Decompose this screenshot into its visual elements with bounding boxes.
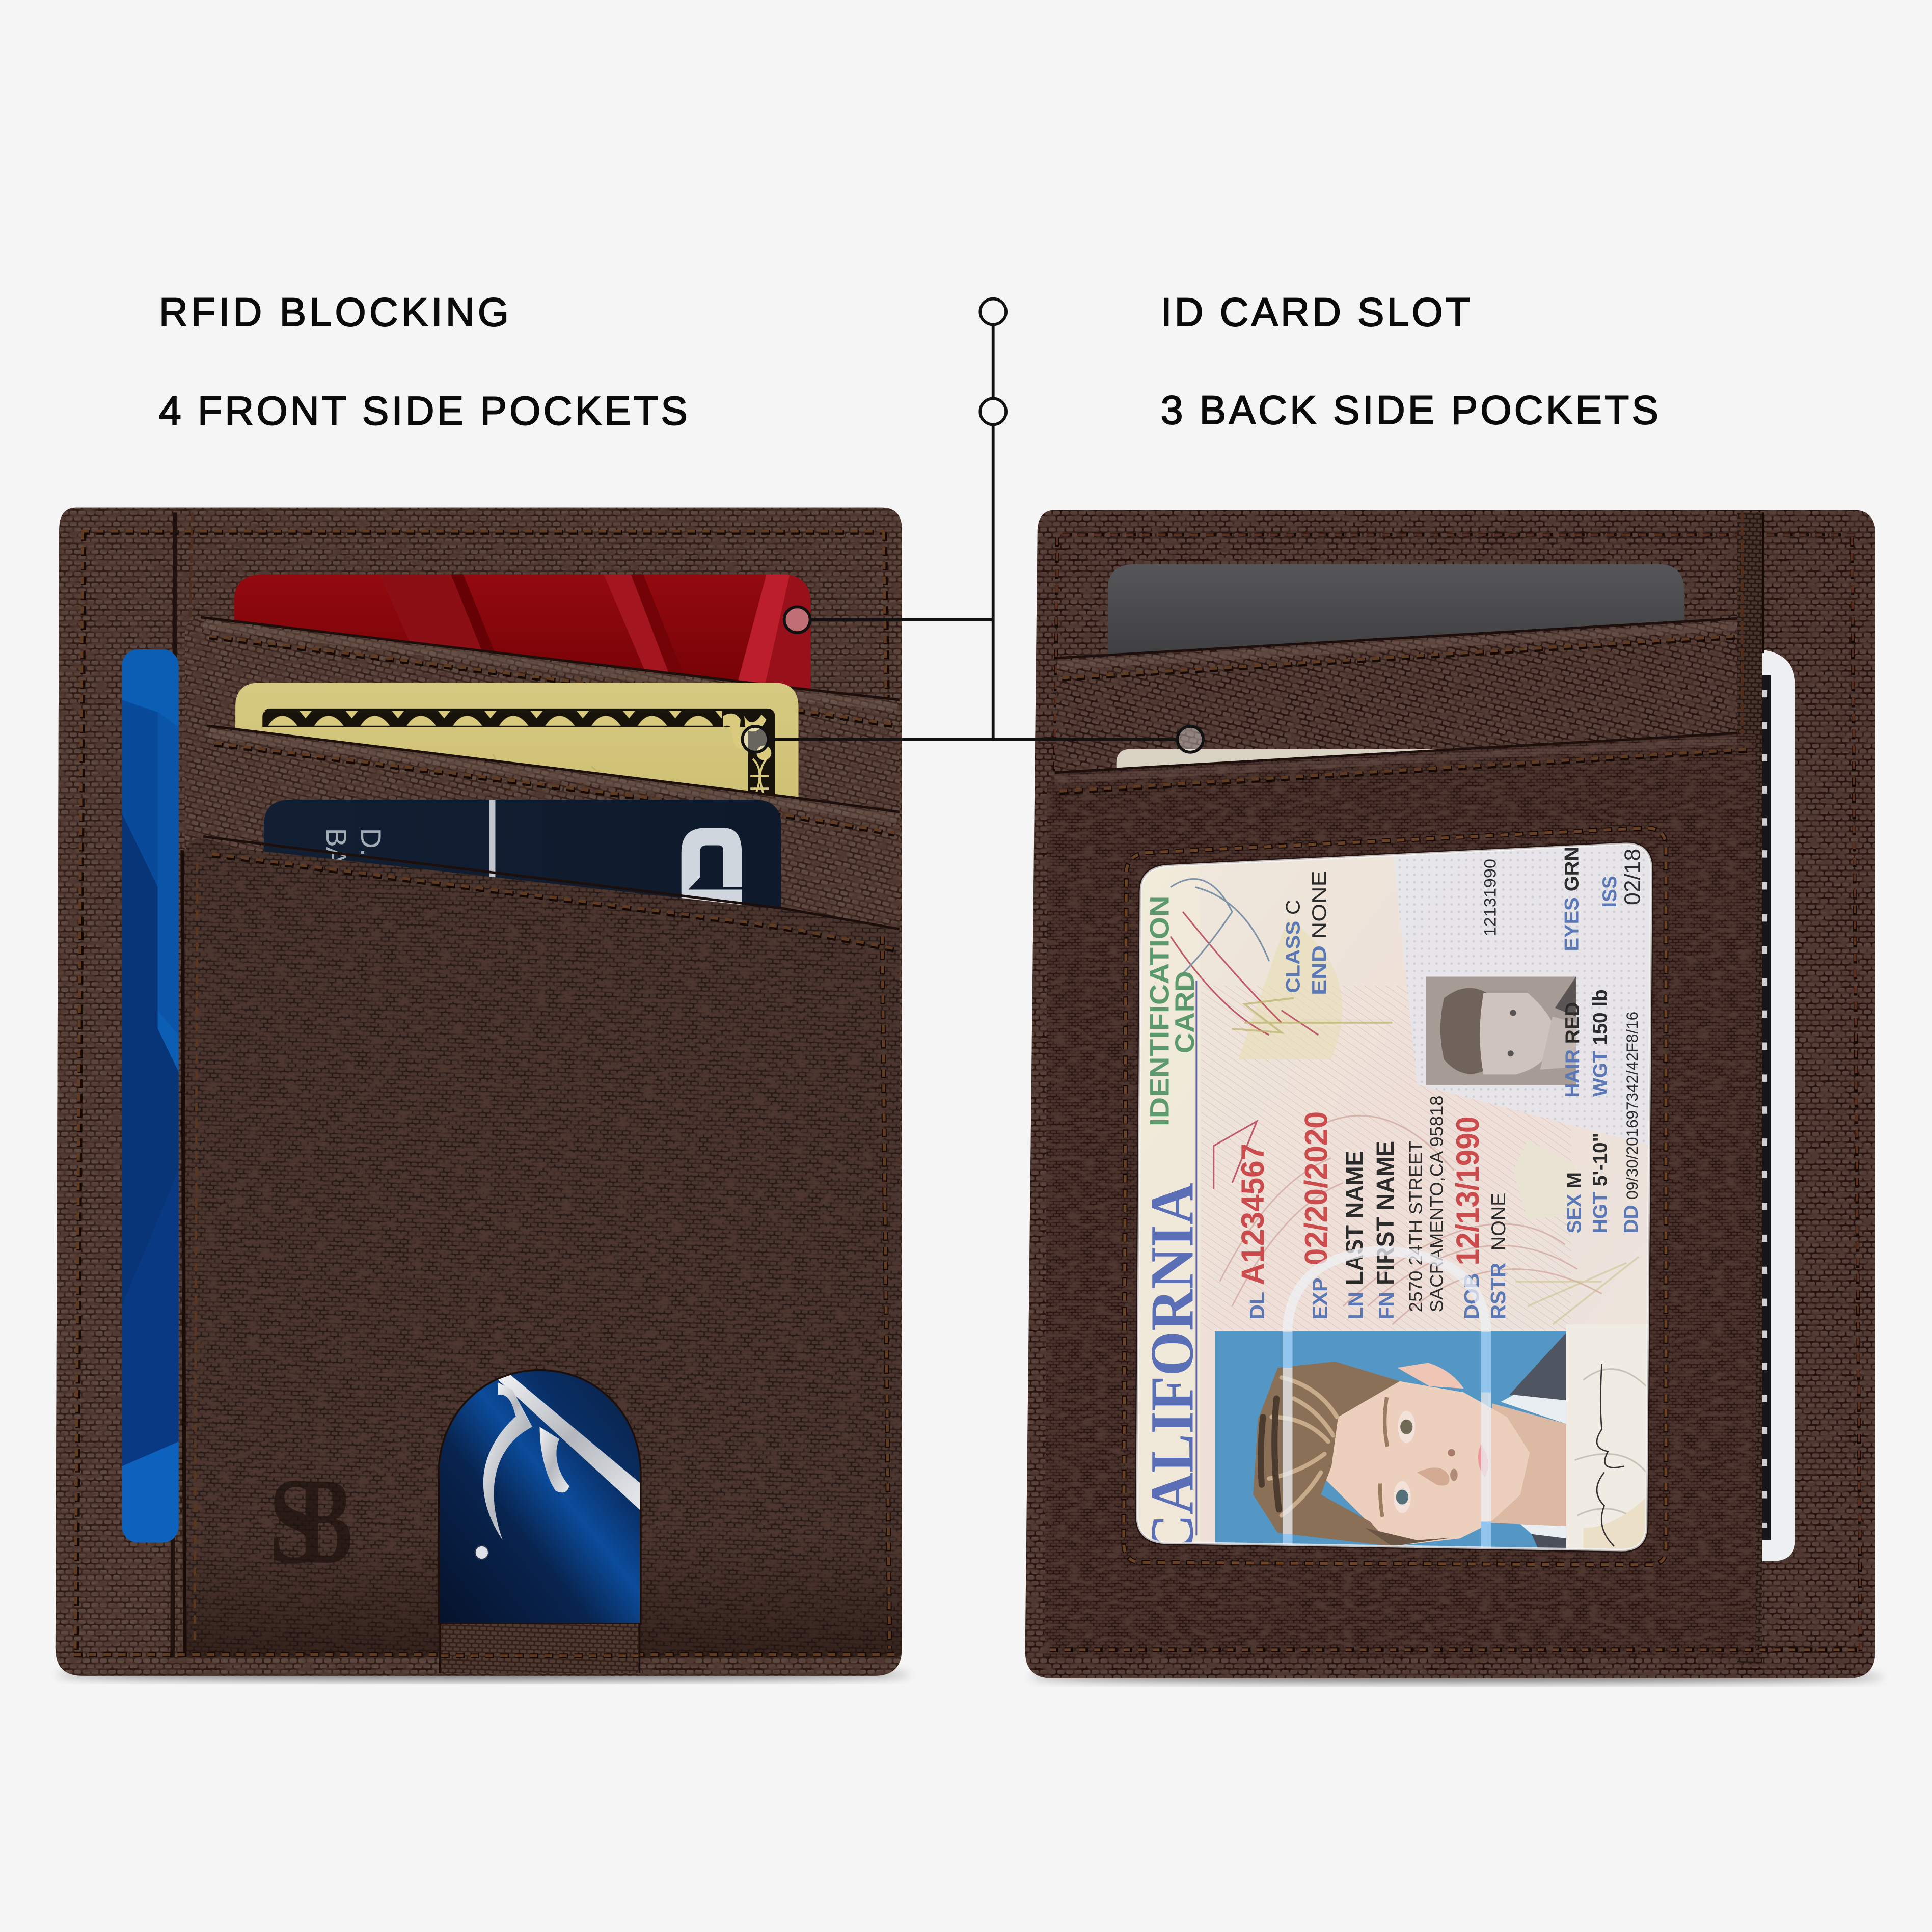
dark card logo: [682, 828, 742, 912]
ID fields: FIRST NAME: [1372, 1141, 1399, 1285]
heading: RFID blocking: RFID BLOCKING: [159, 290, 509, 335]
ID fields: DL: [1245, 1292, 1269, 1320]
ID fields: END NONE: [1309, 871, 1330, 995]
right wallet: back view: [1025, 510, 1883, 1682]
ID fields: [1235, 847, 1645, 1320]
ID fields: EYES GRN: [1561, 847, 1583, 951]
bottom tab: [440, 1624, 639, 1673]
marker: RFID heading: [980, 299, 1006, 324]
left wallet: front view: [56, 508, 909, 1679]
ID fields: NONE: [1488, 1193, 1510, 1250]
ID fields: HAIR RED: [1562, 1002, 1584, 1098]
ID heading: California: CALIFORNIA: [1138, 1183, 1207, 1556]
front pocket: [182, 838, 902, 1657]
blue card: [122, 649, 179, 1543]
ID fields: SACRAMENTO,CA 95818: [1427, 1095, 1447, 1312]
white card: [1759, 649, 1795, 1561]
lanyard arch: [1288, 1250, 1486, 1550]
ID fields: 2570 24TH STREET: [1406, 1141, 1426, 1312]
ID card: [1127, 838, 1657, 1559]
marker: front pockets heading: [980, 399, 1006, 424]
ID fields: 02/18: [1621, 849, 1645, 905]
gold card border: [262, 709, 775, 801]
heading: ID card slot: ID CARD SLOT: [1161, 290, 1470, 335]
ID fields: A1234567: [1235, 1144, 1271, 1285]
ID fields: FN: [1375, 1292, 1398, 1320]
signature: [1597, 1364, 1624, 1546]
main portrait photo: [1215, 1331, 1566, 1551]
ID fields: RSTR: [1486, 1263, 1510, 1320]
embossed logo: B: [297, 1453, 353, 1589]
ID fields: HGT 5'-10": [1589, 1133, 1611, 1233]
ID fields: ISS: [1599, 876, 1621, 908]
ID fields: 02/20/2020: [1298, 1111, 1334, 1265]
pocket two: [185, 727, 900, 973]
ID fields: LAST NAME: [1341, 1151, 1368, 1285]
marker: back pocket: [1177, 726, 1203, 752]
ID fields: WGT 150 lb: [1589, 989, 1611, 1097]
embossed logo: [268, 1453, 353, 1589]
dark card: BA: [320, 828, 352, 866]
gold card corner ornament: [723, 714, 771, 760]
bottom stitching: [1050, 1649, 1858, 1651]
ID fields: 12/13/1990: [1450, 1117, 1486, 1265]
security map pattern: [1138, 844, 1652, 1559]
red card: [234, 574, 811, 690]
connector lines and markers: [742, 299, 1203, 752]
front panel: [1045, 734, 1756, 1657]
dark card: [264, 800, 781, 918]
ID fields: DD 09/30/201697342/42F8/16: [1620, 1012, 1642, 1233]
ID gloss edge: [1137, 844, 1651, 1550]
small ghost photo: [1426, 977, 1576, 1085]
pocket one: [1055, 620, 1737, 801]
embossed logo: S: [268, 1453, 322, 1589]
marker: gold card: [742, 726, 768, 752]
silver antler: [483, 1382, 569, 1540]
seam: [1737, 512, 1762, 1664]
marker: red card: [784, 607, 810, 633]
wallet body: [56, 508, 902, 1676]
gold card: [235, 683, 799, 800]
wallet body: [1025, 510, 1875, 1678]
ID fields: SEX M: [1564, 1172, 1586, 1233]
thumb notch: [439, 1370, 641, 1624]
bottom stitching: [74, 1654, 894, 1656]
ID fields: 12131990: [1481, 859, 1500, 936]
ID fields: LN: [1344, 1292, 1367, 1320]
window stitching: [1124, 828, 1666, 1565]
pocket one: [185, 618, 900, 862]
ID fields: EXP: [1308, 1277, 1331, 1320]
ID heading: identification card: IDENTIFICATION: [1145, 896, 1175, 1126]
dark card text: D.: [355, 828, 387, 856]
heading: 3 back side pockets: 3 BACK SIDE POCKETS: [1161, 388, 1658, 432]
ID card: CARD: [1170, 971, 1200, 1053]
heading: 4 front side pockets: 4 FRONT SIDE POCKETS: [159, 388, 688, 433]
ID fields: CLASS C: [1282, 900, 1304, 993]
ID fields: DOB: [1460, 1273, 1483, 1320]
tan card: [1117, 749, 1486, 779]
grey card: [1108, 564, 1684, 656]
